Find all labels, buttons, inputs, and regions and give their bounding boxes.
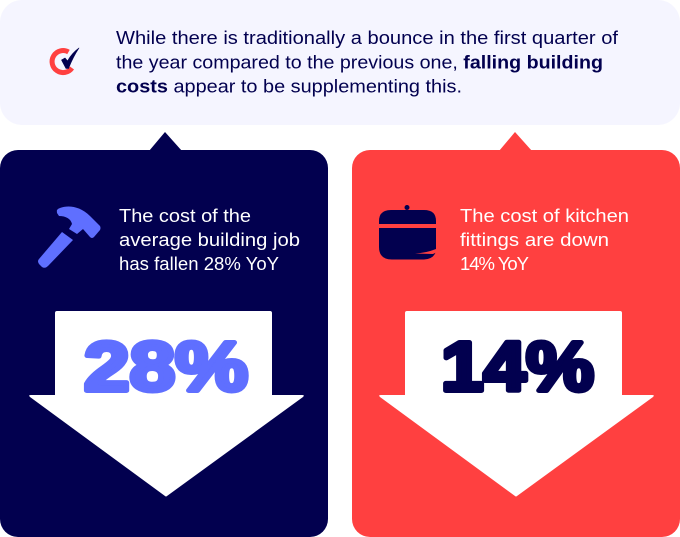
body text bbox=[460, 205, 629, 274]
arrow: down, white bbox=[379, 311, 654, 496]
body text: 14% YoY bbox=[460, 253, 529, 274]
icon: check mark in ring bbox=[52, 48, 79, 73]
body text: average building job bbox=[119, 229, 300, 250]
panel: intro callout bbox=[0, 0, 680, 125]
body text: The cost of the bbox=[119, 205, 251, 226]
body text: The cost of kitchen bbox=[460, 205, 629, 226]
icon: pot bbox=[379, 205, 436, 260]
panel: kitchen fittings bbox=[352, 132, 680, 537]
intro text: While there is traditionally a bounce in the first quarter of bbox=[116, 27, 619, 48]
body text: fittings are down bbox=[460, 229, 609, 250]
pointer: red triangle bbox=[499, 132, 532, 151]
intro text: the year compared to the previous one, falling building bbox=[116, 51, 603, 72]
body text bbox=[119, 205, 300, 274]
icon: hammer bbox=[38, 207, 100, 268]
stat: 28%: 28% bbox=[84, 328, 248, 406]
stat: 14%: 14% bbox=[441, 328, 594, 406]
arrow: down, white bbox=[29, 311, 304, 496]
intro text: costs appear to be supplementing this. bbox=[116, 76, 462, 96]
pointer: navy triangle bbox=[149, 132, 182, 151]
intro text bbox=[116, 27, 619, 96]
panel: building job bbox=[0, 132, 328, 537]
body text: has fallen 28% YoY bbox=[119, 253, 279, 274]
